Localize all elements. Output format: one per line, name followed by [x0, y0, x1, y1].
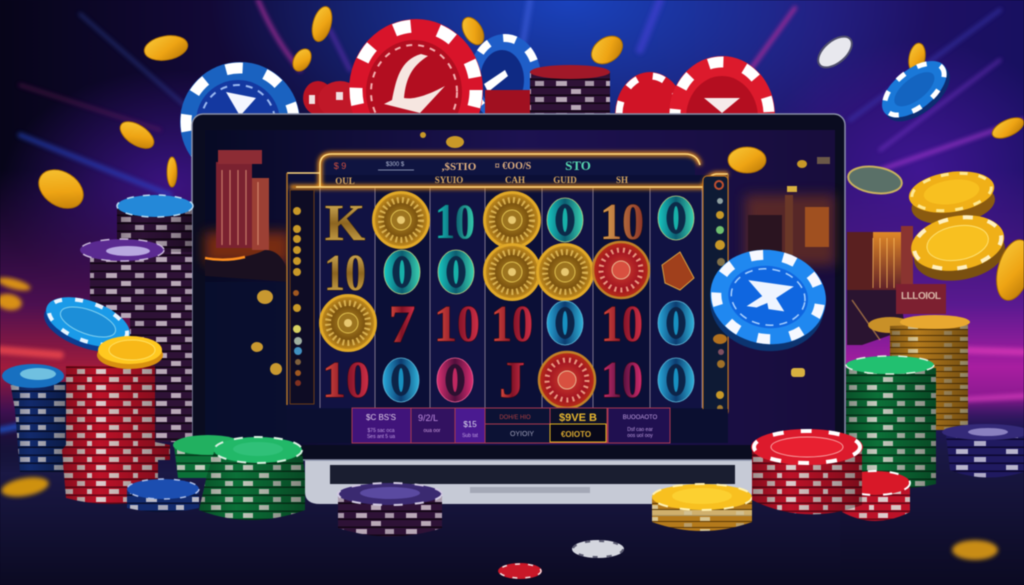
- gold stack centre: [652, 484, 752, 531]
- right side paytable icons: [703, 176, 728, 416]
- stack: dark blue far left: [2, 364, 66, 472]
- screen city left: [205, 132, 464, 442]
- bet control panel: $15: [463, 420, 477, 429]
- outside city skyline right: [847, 226, 946, 345]
- reel row 3: 10: [434, 296, 480, 353]
- slot header texts: OUL: [335, 176, 355, 186]
- screen city right: [728, 147, 835, 377]
- stack: red tall: [62, 366, 170, 504]
- green stack right: [846, 356, 936, 488]
- reel row 4: 10: [601, 352, 643, 409]
- bet control panel: oos uol ooy: [627, 433, 653, 439]
- chip stacks left: [2, 195, 305, 520]
- bet control panel: Ses ant 5 ua: [367, 434, 395, 440]
- bet control panel: $C BS'S: [366, 413, 396, 422]
- screen: [205, 130, 835, 445]
- chip stack behind laptop: dark purple: [530, 65, 610, 116]
- reel row 1: 10: [435, 193, 475, 249]
- reel columns: [320, 188, 702, 408]
- reel row 1: K: [325, 195, 366, 252]
- reel row 3: 10: [491, 296, 533, 353]
- falling gold coins upper left: [0, 4, 488, 312]
- falling coins and chips upper right: [586, 30, 1024, 197]
- stack: green back: [173, 435, 243, 478]
- laptop base: [305, 459, 752, 504]
- reel row 3: [319, 294, 694, 354]
- reel row 3: 10: [601, 296, 643, 353]
- bet control panel: [287, 408, 728, 443]
- slot header texts: STO: [565, 158, 591, 173]
- chip: gold on red stack: [97, 336, 163, 369]
- slot header texts: ,$STIO: [442, 161, 477, 173]
- bet control panel: oua oor: [424, 428, 441, 434]
- reel row 3: 7: [388, 294, 416, 354]
- purple stack right: [942, 424, 1024, 478]
- bet control panel: BUOOAOTO: [623, 415, 658, 421]
- left side paytable icons: [290, 190, 314, 404]
- floor chips and coin: [498, 540, 998, 579]
- reel row 4: J: [499, 352, 525, 409]
- slot header texts: GUID: [553, 175, 577, 185]
- laptop: [192, 114, 845, 504]
- reel row 2: 10: [324, 245, 366, 302]
- gold stack right back: [868, 315, 970, 430]
- chip: tilted light blue: [38, 287, 137, 361]
- small red chip cluster: [303, 81, 362, 119]
- slot header texts: [334, 158, 628, 186]
- slot header texts: SH: [616, 175, 628, 185]
- reel row 1: [325, 191, 694, 252]
- stack: purple tall: [80, 239, 192, 442]
- gold chips right: [906, 166, 1024, 304]
- red stack front right: [751, 429, 910, 521]
- chip: large blue behind laptop: [180, 62, 300, 182]
- reel row 1: 10: [600, 194, 644, 251]
- bet control panel: DOH/E HIO: [499, 415, 531, 421]
- glowing gold outlines: [290, 154, 728, 187]
- coin on floor left: [0, 474, 50, 500]
- reel row 4: 10: [322, 352, 370, 409]
- stack: blue low: [127, 479, 199, 512]
- slot header texts: $300 $: [386, 162, 405, 168]
- chip: tilted blue upper right: [872, 50, 960, 132]
- reel row 2: [324, 242, 694, 302]
- laptop lid: [192, 114, 845, 460]
- purple stack centre: [338, 483, 442, 536]
- bet control panel: Dsf cao ear: [627, 427, 653, 433]
- stack: green front: [199, 437, 305, 520]
- bet control panel: $75 sac oca: [368, 428, 395, 434]
- bet control panel: 9/2/L: [418, 413, 438, 423]
- bet control panel: Sub tat: [462, 433, 479, 439]
- slot header texts: ¤ €OO/S: [495, 161, 532, 172]
- chip: large red: [349, 19, 483, 161]
- chip: blue behind red: [469, 34, 541, 122]
- stack: blue-top: [117, 195, 193, 262]
- slot header texts: CAH: [505, 175, 525, 185]
- bet control panel: OYIOIY: [510, 431, 534, 438]
- slot header texts: SYUIO: [435, 175, 463, 185]
- reel row 4: [322, 352, 694, 409]
- slot header texts: $ 9: [334, 161, 346, 171]
- chip: large blue foreground on screen: [703, 242, 832, 359]
- chips: red pair behind laptop: [615, 56, 775, 174]
- outside city skyline right: LLLOIOL: [901, 291, 941, 302]
- bet control panel: €OIOTO: [561, 430, 591, 439]
- bet control panel: $9VE B: [559, 412, 597, 424]
- slot machine frame: [287, 154, 728, 413]
